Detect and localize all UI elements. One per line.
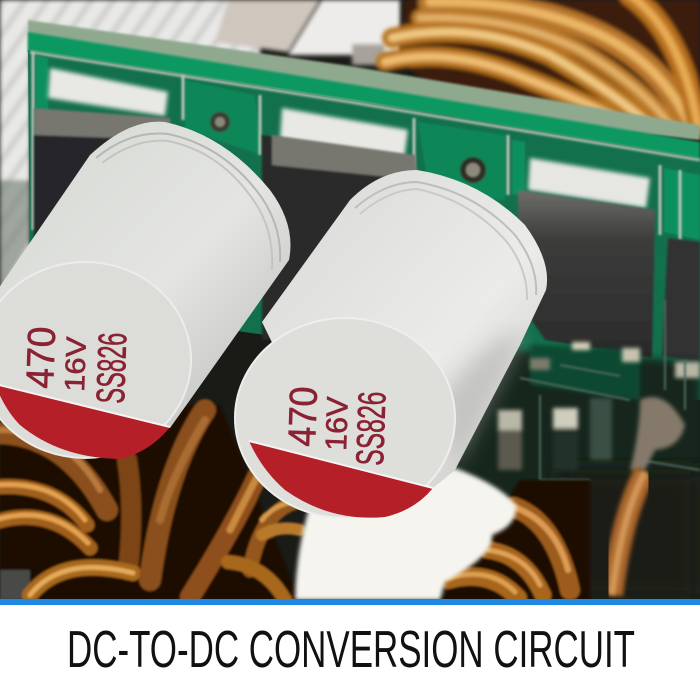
body <box>262 170 547 488</box>
printed value: right <box>281 386 395 466</box>
board top edge <box>28 20 700 140</box>
printed value: left: SS826 <box>89 332 135 404</box>
board face <box>28 50 700 400</box>
solder joint and wire <box>612 397 685 595</box>
caption bar accent <box>0 599 700 605</box>
body <box>0 122 290 428</box>
lower dark circuit board <box>440 300 700 600</box>
icon: copper coil top right <box>385 0 700 130</box>
icons: copper coils bottom <box>0 405 590 600</box>
top face <box>0 262 191 458</box>
capacitor: left <box>0 122 290 459</box>
white connectors <box>48 68 650 208</box>
caption background <box>0 605 700 700</box>
printed value: right: 470 <box>281 386 326 447</box>
printed value: right: 16V <box>320 396 355 451</box>
white glue blob <box>295 468 516 600</box>
red stripe <box>0 384 170 459</box>
green pads <box>36 55 700 240</box>
green circuit board <box>28 20 700 400</box>
printed value: right: SS826 <box>349 391 395 466</box>
top face <box>235 318 455 518</box>
printed value: left: 470 <box>19 326 64 389</box>
bright green stripe <box>28 32 700 160</box>
red stripe <box>249 441 433 518</box>
capacitor: right <box>235 170 547 518</box>
printed value: left <box>19 326 135 404</box>
printed value: left: 16V <box>59 336 92 392</box>
white traces <box>33 52 680 240</box>
black MOSFETs <box>34 108 700 362</box>
